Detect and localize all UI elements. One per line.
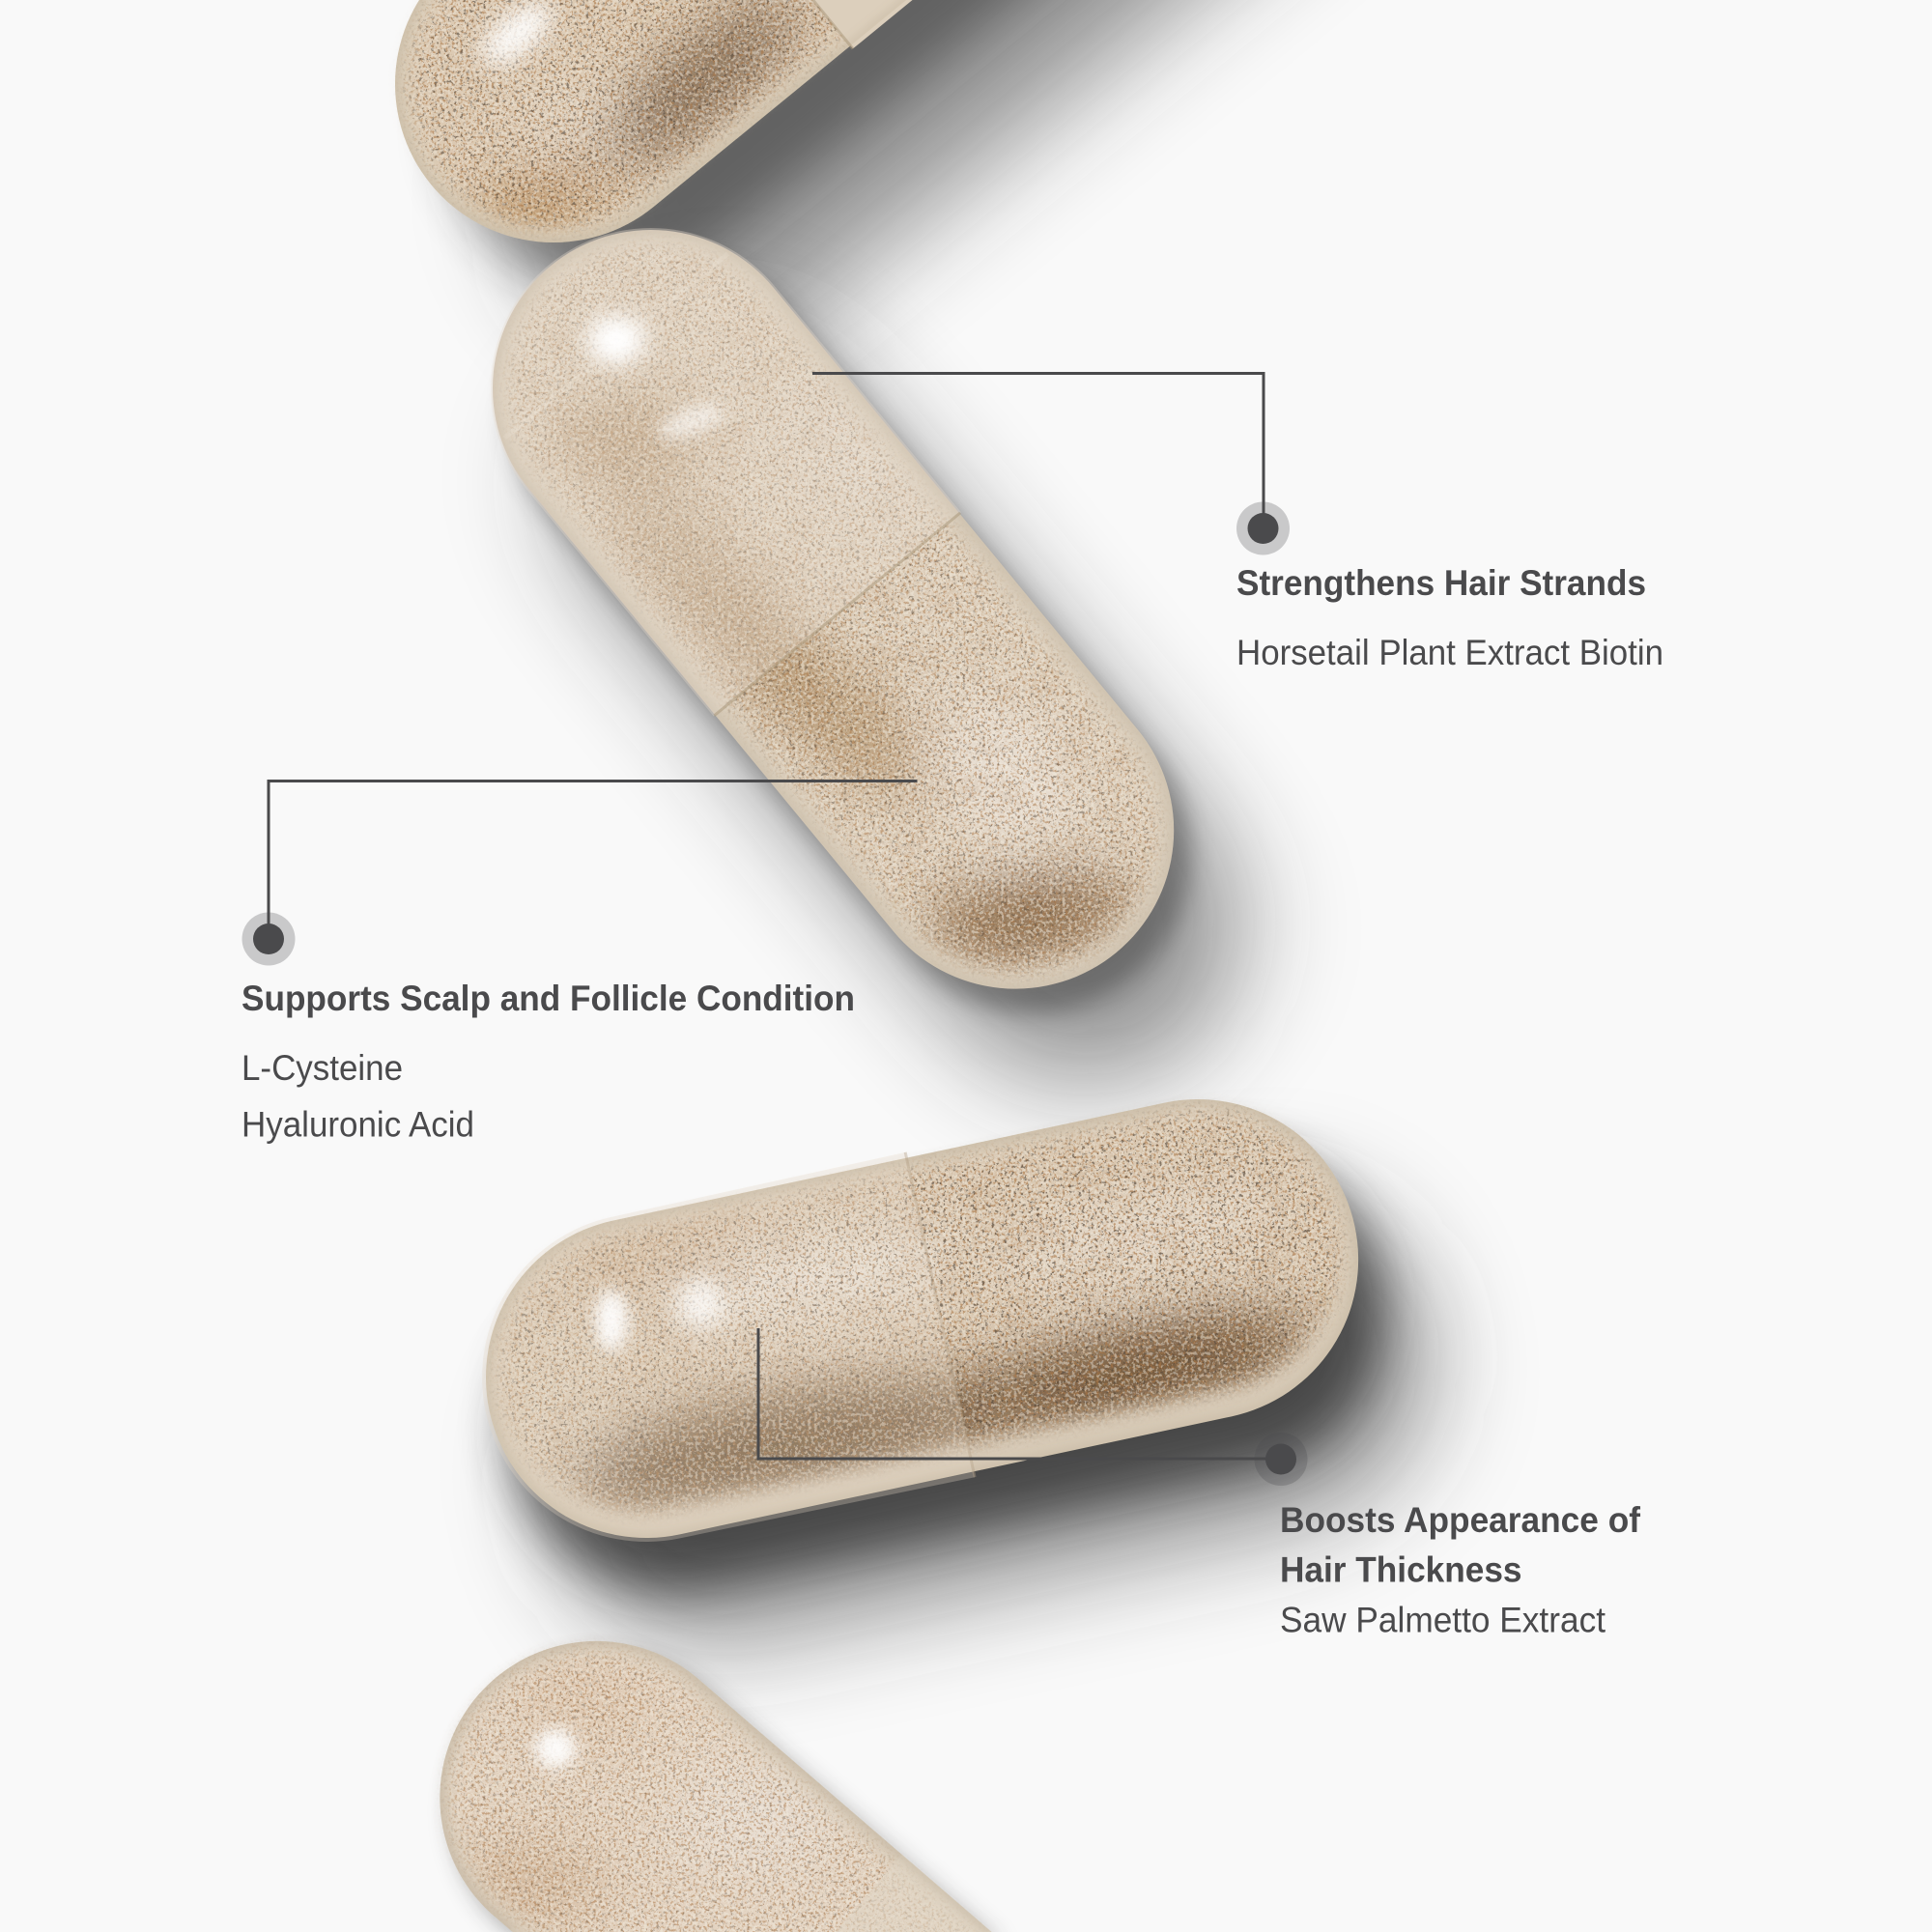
heading line 2: Hair Thickness: [1280, 1549, 1522, 1590]
marker dot: [242, 912, 296, 966]
leader line: [812, 373, 1264, 522]
heading: Strengthens Hair Strands: [1236, 563, 1646, 603]
capsule cap overlay: [647, 0, 1329, 48]
capsule shadows: [384, 0, 1456, 1932]
leader line: [269, 781, 918, 932]
capsule: bottom, cropped by edge: [425, 1633, 1005, 1932]
capsule cap overlay: [451, 1152, 975, 1575]
capsule cap overlay: [425, 162, 961, 716]
ingredients: Horsetail Plant Extract Biotin: [1236, 633, 1663, 672]
heading line 1: Boosts Appearance of: [1280, 1500, 1641, 1540]
capsule: third, near horizontal: [482, 1099, 1358, 1542]
ingredient: L-Cysteine: L-Cysteine: [242, 1048, 403, 1088]
ingredient: Hyaluronic Acid: Hyaluronic Acid: [242, 1105, 474, 1144]
leader line: [758, 1328, 1275, 1459]
ingredient: Saw Palmetto Extract: [1280, 1600, 1606, 1640]
callout: boosts appearance of hair thickness: [758, 1328, 1641, 1640]
capsule: top, cropped by edge: [395, 0, 912, 242]
marker dot: [1254, 1433, 1308, 1486]
heading: Supports Scalp and Follicle Condition: [242, 979, 855, 1018]
marker dot: [1236, 502, 1290, 554]
capsule cap overlay: [836, 1855, 991, 1932]
callout: strengthens hair strands: [812, 373, 1663, 672]
capsule: second, diagonal: [491, 228, 1175, 989]
callout: supports scalp and follicle condition: [242, 781, 918, 1144]
